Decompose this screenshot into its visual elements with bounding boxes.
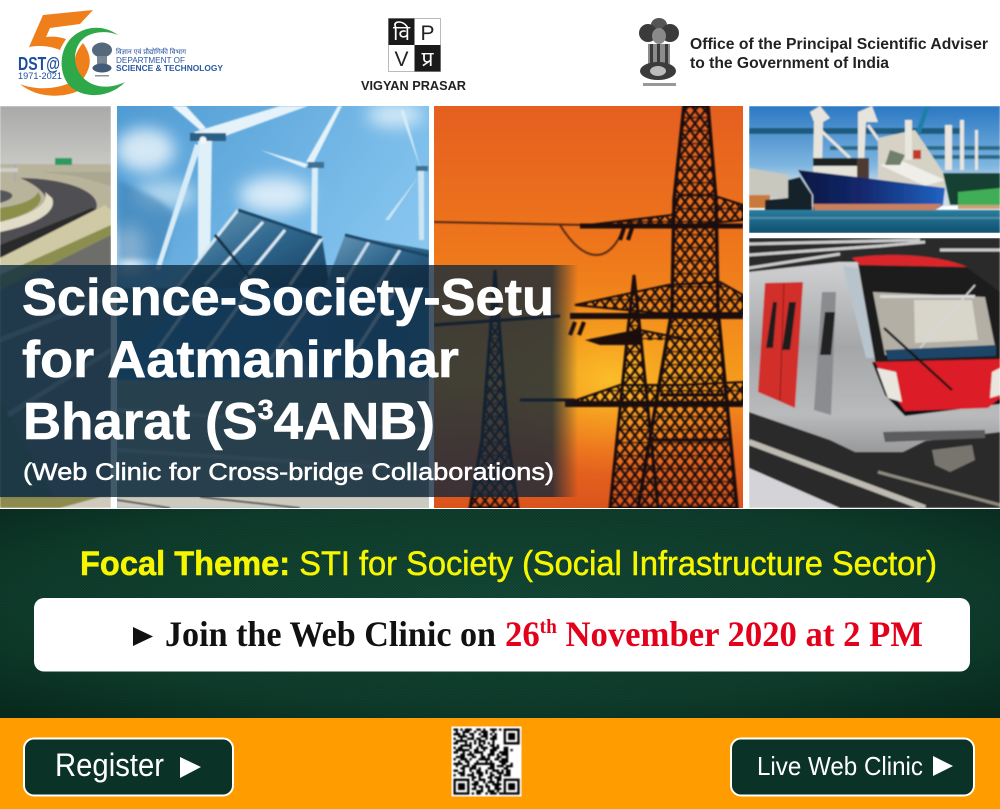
pylon behind panel	[470, 270, 518, 508]
front pillar	[843, 266, 875, 358]
department name line two: SCIENCE & TECHNOLOGY	[116, 63, 223, 73]
crane beams	[749, 128, 960, 134]
clouds	[114, 103, 423, 275]
icon: play arrow	[180, 757, 201, 778]
icon: checkered square	[388, 18, 440, 72]
DST wordmark: DST@	[18, 54, 60, 74]
date: 26	[505, 614, 541, 654]
office name line one: Office of the Principal Scientific Adviser	[690, 36, 988, 53]
live web clinic button	[731, 738, 974, 796]
title line two: for Aatmanirbhar	[22, 331, 459, 389]
crossarm three	[565, 330, 743, 404]
icon: play arrow	[933, 756, 953, 776]
superstructure	[878, 130, 945, 190]
icon: right pointer	[133, 627, 153, 646]
roof	[852, 255, 967, 267]
icon: green crescent	[62, 28, 125, 95]
photo: red and silver metro train	[749, 238, 1000, 508]
icon: small emblem	[92, 42, 112, 76]
panel: focal theme	[0, 509, 1000, 718]
distant shore	[749, 168, 788, 198]
body	[749, 262, 1000, 452]
crossarm two	[575, 282, 743, 314]
crossarm one	[580, 195, 743, 226]
road below panels	[117, 380, 429, 498]
icon: orange leaf	[75, 43, 90, 79]
date: November 2020 at 2 PM	[557, 614, 923, 654]
catenary	[749, 240, 1000, 268]
join line: Join the Web Clinic on	[165, 614, 496, 654]
rails	[749, 468, 840, 508]
green vessel	[943, 173, 1000, 205]
icon: checkered square: V	[394, 48, 409, 71]
photo: highway	[0, 106, 111, 508]
turbines	[155, 106, 428, 270]
title line three: Bharat (S	[23, 393, 254, 451]
register button	[24, 738, 233, 796]
logo: DST 50 years	[18, 10, 223, 96]
crane towers	[810, 106, 830, 170]
skirt	[883, 430, 985, 442]
icon: checkered square: प्र	[422, 48, 435, 71]
coupler	[932, 445, 975, 472]
icon: QR code	[452, 726, 522, 796]
header bar	[0, 0, 1000, 106]
live web clinic button: Live Web Clinic	[757, 751, 923, 781]
photo: electricity pylons on orange sky	[434, 106, 743, 508]
insulators	[570, 228, 632, 335]
icon: checkered square: वि	[393, 21, 410, 45]
years: 1971-2021	[18, 71, 62, 81]
register button: Register	[55, 747, 164, 783]
photo: cargo ship in harbour	[749, 106, 1000, 233]
logo wordmark: VIGYAN PRASAR	[361, 78, 467, 93]
title backing panel	[0, 265, 578, 497]
nose outline	[872, 358, 1000, 416]
department name line one: DEPARTMENT OF	[116, 55, 185, 65]
back pylon	[610, 275, 658, 508]
icon: national emblem	[639, 18, 679, 86]
windshield	[873, 292, 996, 355]
main pylon	[638, 106, 737, 508]
title	[22, 269, 554, 486]
dark frame	[858, 264, 1000, 366]
hull	[798, 170, 945, 213]
tug	[765, 177, 812, 210]
office name line two: to the Government of India	[690, 55, 889, 72]
title line three: 3	[258, 394, 274, 425]
icon: checkered square: P	[420, 22, 435, 45]
side panel	[814, 292, 836, 415]
date callout	[34, 598, 970, 672]
nose	[875, 359, 1000, 411]
logo: Office of the Principal Scientific Adviser	[639, 18, 988, 86]
panel: action bar	[0, 718, 1000, 809]
subtitle: (Web Clinic for Cross-bridge Collaborations)	[23, 459, 554, 486]
Hindi department name: विज्ञान एवं प्रौद्योगिकी विभाग	[116, 47, 187, 56]
power cable	[434, 222, 625, 255]
logo: Vigyan Prasar	[361, 18, 467, 93]
icon: orange numeral five	[20, 10, 93, 96]
side door	[758, 282, 803, 408]
title line three: 4ANB)	[274, 393, 435, 451]
solar panels	[117, 210, 429, 508]
photo: wind turbines and solar panels	[114, 103, 429, 508]
photo band	[0, 103, 1000, 509]
title line one: Science-Society-Setu	[22, 269, 554, 327]
date: th	[540, 616, 557, 638]
focal theme heading: Focal Theme: STI for Society (Social Infrastructure Sector)	[80, 545, 937, 583]
